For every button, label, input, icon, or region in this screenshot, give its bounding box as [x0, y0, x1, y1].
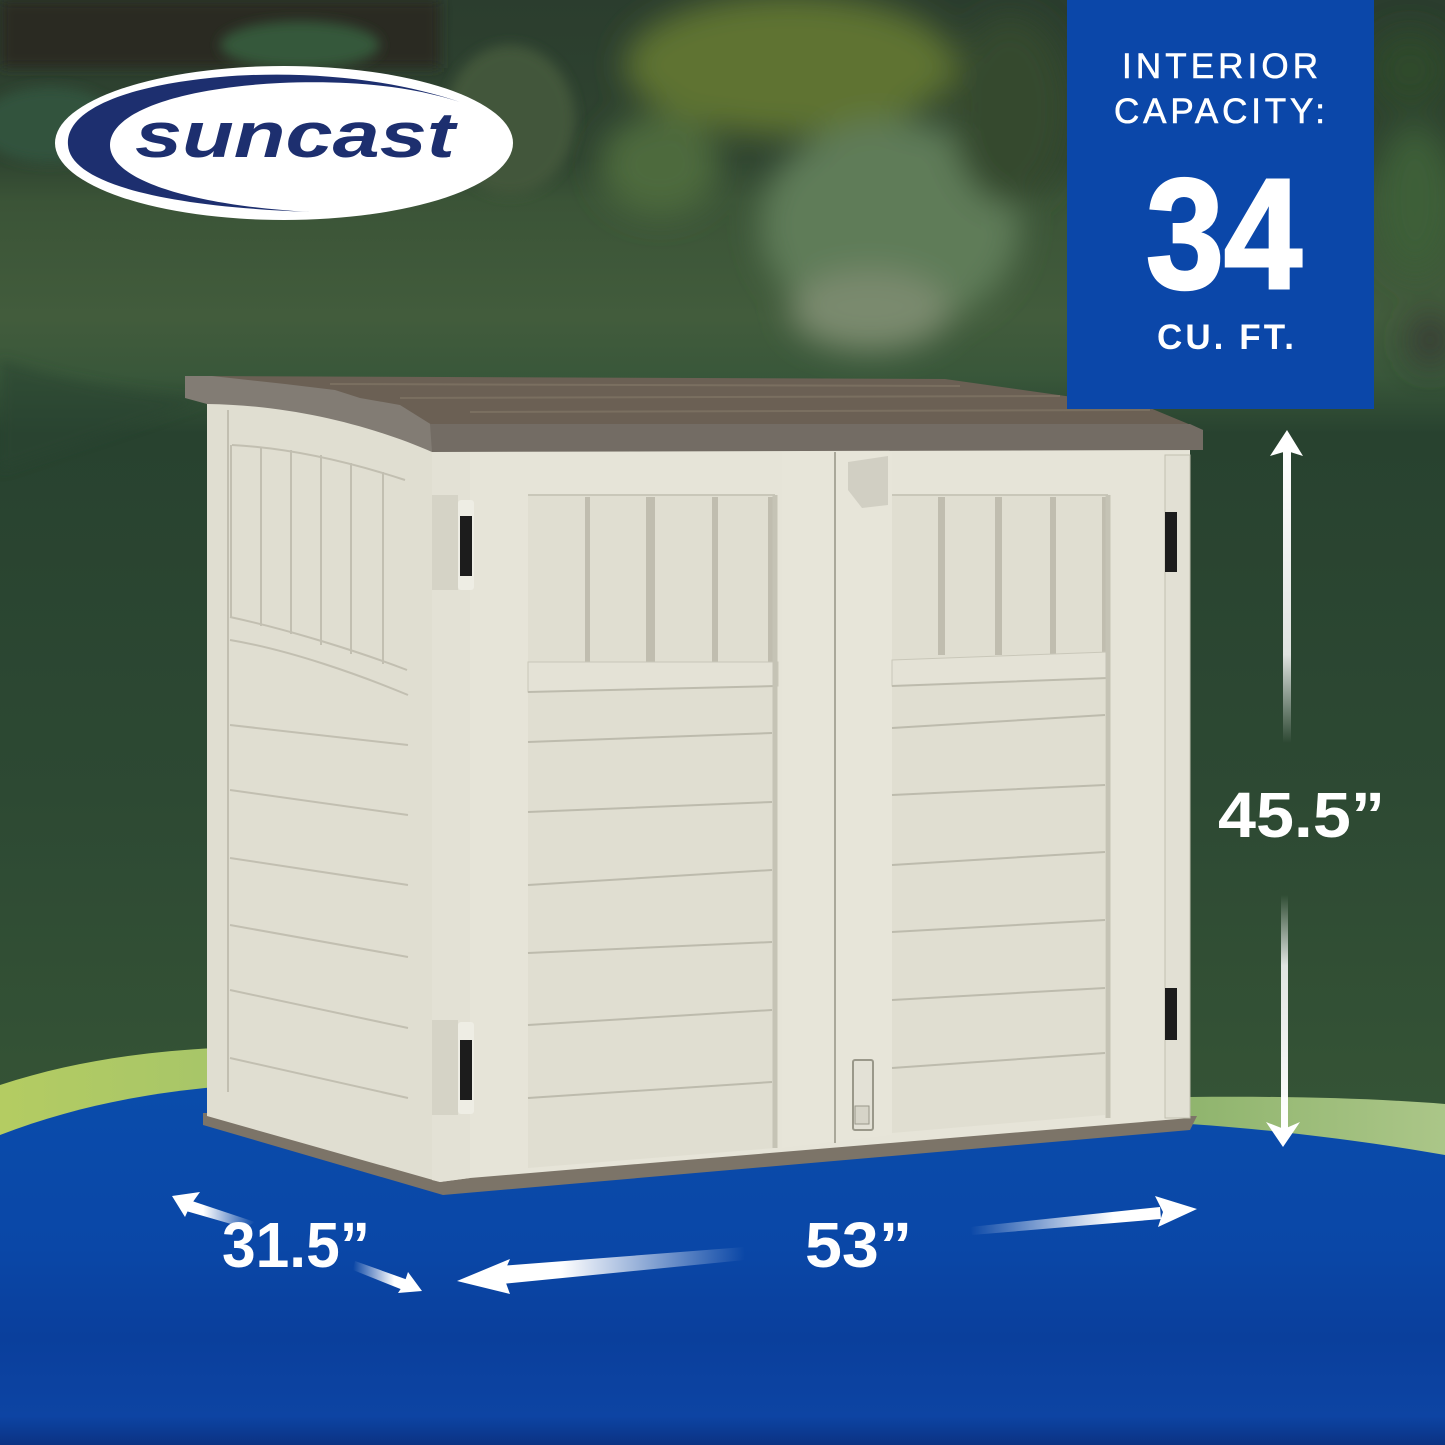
height arrow: [1266, 430, 1303, 1147]
left door: [528, 495, 778, 1168]
roof front fascia: [430, 424, 1203, 452]
hinge recesses: [432, 495, 458, 1115]
logo: Suncast: [55, 66, 513, 220]
hinges: [458, 500, 1177, 1114]
handle slot: [853, 1060, 873, 1130]
left door window grooves: [585, 497, 776, 662]
right door rail: [892, 652, 1108, 686]
capacity heading: [1114, 47, 1325, 131]
capacity unit: CU. FT.: [1157, 318, 1294, 357]
base: [203, 1113, 1197, 1195]
lit lawn corner: [2, 366, 84, 392]
roof: [185, 376, 1203, 452]
right post: [1165, 455, 1190, 1118]
side wall: [207, 398, 470, 1182]
front wall: [470, 450, 1190, 1178]
depth arrow: [172, 1192, 422, 1293]
foliage centre and right: [600, 0, 1445, 368]
capacity panel: [1067, 0, 1374, 409]
right door: [892, 495, 1108, 1133]
side corner post: [432, 450, 470, 1182]
centre post: [782, 452, 892, 1148]
roof side fascia: [185, 376, 432, 452]
left door rail: [528, 662, 778, 692]
capacity number: 34: [1146, 147, 1302, 322]
depth label: 31.5”: [222, 1209, 370, 1281]
logo swoosh: [68, 75, 460, 212]
roof ribs: [330, 384, 1150, 412]
latch: [848, 456, 888, 508]
shed: [185, 376, 1203, 1195]
height label: 45.5”: [1218, 779, 1385, 851]
foliage left: [0, 21, 575, 195]
green edge: [0, 1048, 1445, 1200]
roof top: [205, 376, 1203, 432]
logo wordmark: suncast: [135, 99, 459, 171]
left door boards: [528, 686, 776, 1098]
side grooves: [228, 410, 408, 1098]
blue ground: [0, 1087, 1445, 1445]
fence: [0, 0, 440, 68]
capacity heading: CAPACITY:: [1114, 92, 1325, 131]
width label: 53”: [805, 1209, 912, 1281]
background: garden lawn: [0, 0, 1445, 1104]
right door window grooves: [938, 497, 1108, 655]
capacity heading: INTERIOR: [1122, 47, 1318, 86]
width arrow: [457, 1196, 1197, 1294]
floor: green edge and blue ground: [0, 1048, 1445, 1445]
